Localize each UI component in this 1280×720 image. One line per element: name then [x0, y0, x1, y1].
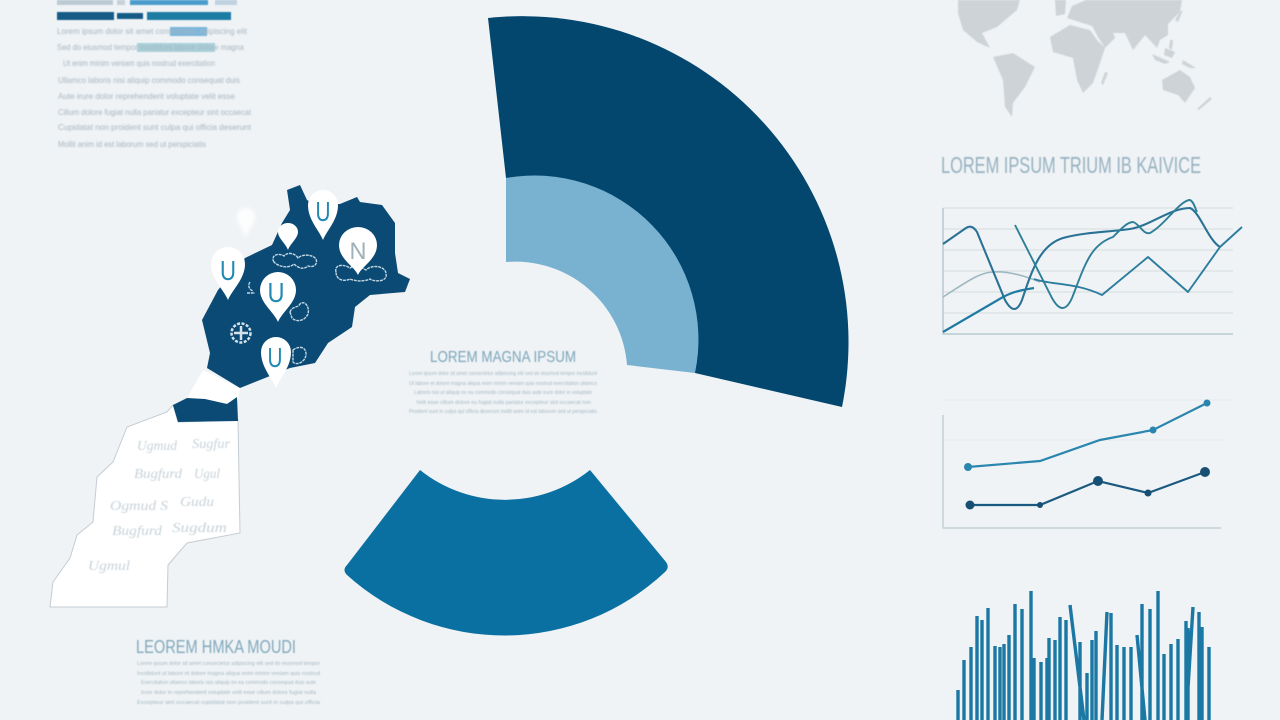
center paragraph: Laboris nisi ut aliquip ex ea commodo consequat duis aute irure dolor in voluptate [414, 390, 592, 396]
center paragraph [409, 371, 597, 415]
top bars [57, 0, 237, 52]
paragraph lines: Cupidatat non proident sunt culpa qui officia deserunt [58, 122, 252, 132]
segment: teal bottom [344, 470, 668, 635]
center paragraph: Velit esse cillum dolore eu fugiat nulla pariatur excepteur sint occaecat non [416, 400, 591, 406]
paragraph lines: Lorem ipsum dolor sit amet consectetur adipiscing elit [57, 26, 248, 36]
pin 4: U [220, 255, 236, 286]
bottom-left heading: LEOREM HMKA MOUDI [136, 637, 296, 657]
center paragraph: Proident sunt in culpa qui officia deserunt mollit anim id est laborum sed ut perspiciatis [409, 409, 597, 415]
pin 4 [211, 247, 245, 300]
line chart [943, 200, 1242, 334]
series: teal [1015, 200, 1197, 308]
handwritten labels: Ugul [194, 467, 220, 482]
pin 1 [308, 190, 338, 240]
bottom-left paragraph: Exercitation ullamco laboris nisi aliquip ex ea commodo consequat duis aute [141, 680, 316, 686]
pin 3: N [350, 238, 366, 265]
paragraph lines: Ut enim minim veniam quis nostrud exercitation [63, 58, 215, 68]
bottom-left paragraph: Incididunt ut labore et dolore magna aliqua enim minim veniam quis nostrud [137, 671, 320, 677]
paragraph lines: Sed do eiusmod tempor incididunt labore dolore magna [57, 42, 244, 52]
handwritten labels: Bugfurd [134, 467, 183, 482]
series: lower [966, 467, 1210, 510]
pin 2 [278, 223, 298, 250]
handwritten labels: Ogmud S [110, 499, 168, 514]
map: Morocco regions [50, 185, 410, 607]
center heading: LOREM MAGNA IPSUM [430, 349, 576, 366]
paragraph lines: Ullamco laboris nisi aliquip commodo consequat duis [58, 75, 240, 85]
pin 6: U [268, 342, 282, 373]
pin 5 [260, 272, 296, 322]
series: dark [943, 208, 1220, 309]
series: gray [943, 272, 1040, 297]
bottom-left paragraph [137, 661, 321, 706]
pin 3 [339, 227, 377, 275]
segment: dark outer [488, 16, 849, 407]
handwritten labels: Gudu [180, 495, 214, 510]
pin 5: U [268, 277, 284, 308]
handwritten labels: Sugdum [172, 521, 227, 536]
map region: northern dark area [202, 185, 410, 388]
paragraph lines [57, 26, 252, 149]
segment: light middle [506, 176, 698, 373]
pin 6 [261, 337, 291, 388]
bottom-left paragraph: Lorem ipsum dolor sit amet consectetur adipiscing elit sed do eiusmod tempor [137, 661, 320, 667]
bottom-left paragraph: Excepteur sint occaecat cupidatat non proident sunt in culpa qui officia [137, 700, 321, 706]
bar chart [958, 591, 1209, 720]
radial chart [344, 16, 849, 635]
map region: white central strip [187, 370, 240, 403]
bottom-left paragraph: Irure dolor in reprehenderit voluptate velit esse cillum dolore fugiat nulla [141, 690, 317, 696]
map region: dark band [173, 397, 238, 422]
handwritten labels: Ugmul [88, 559, 130, 574]
center paragraph: Ut labore et dolore magna aliqua enim minim veniam quis nostrud exercitation ullamco [409, 381, 597, 387]
paragraph lines: Cillum dolore fugiat nulla pariatur excepteur sint occaecat [58, 107, 252, 117]
dot line chart [943, 400, 1233, 528]
handwritten labels: Ugmud [137, 439, 178, 454]
series: low blue [943, 288, 1034, 332]
cloud marks [232, 253, 386, 364]
handwritten labels: Bugfurd [112, 524, 163, 539]
bottom-left text block [136, 637, 321, 706]
panel: top-left text block [57, 0, 252, 149]
handwritten labels [88, 437, 231, 574]
map region: southern white area [50, 405, 240, 607]
series: upper [964, 400, 1210, 471]
ghost pin [237, 208, 255, 237]
series: wave [1034, 227, 1242, 295]
center paragraph: Lorem ipsum dolor sit amet consectetur adipiscing elit sed do eiusmod tempor incididunt [409, 371, 597, 377]
pin 1: U [316, 196, 330, 227]
paragraph lines: Aute irure dolor reprehenderit voluptate velit esse [58, 91, 235, 101]
handwritten labels: Sugfur [192, 437, 231, 452]
world map [958, 0, 1212, 117]
center text block [409, 349, 597, 415]
paragraph lines: Mollit anim id est laborum sed ut perspiciatis [58, 139, 206, 149]
